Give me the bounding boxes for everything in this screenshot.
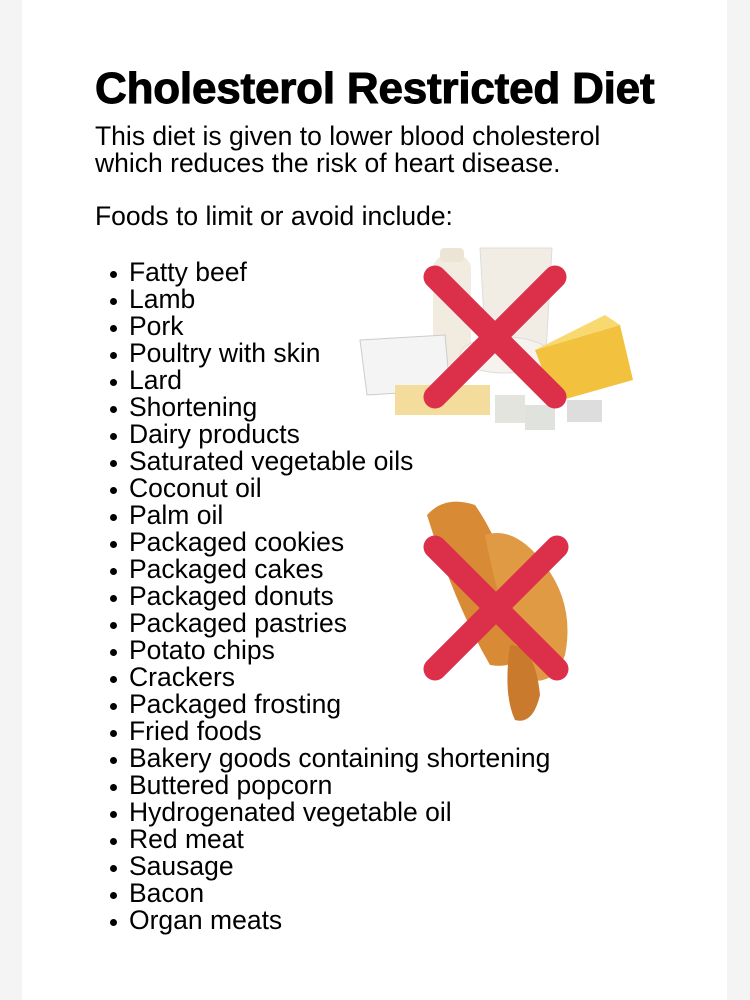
intro text: This diet is given to lower blood cholesterol	[95, 121, 600, 151]
food list: Bakery goods containing shortening	[129, 743, 550, 773]
butter / cheese blocks	[395, 385, 602, 430]
chicken pieces	[427, 502, 568, 721]
food list	[110, 257, 550, 935]
food list: Hydrogenated vegetable oil	[129, 797, 452, 827]
food list: Palm oil	[129, 500, 223, 530]
food list: Packaged cakes	[129, 554, 323, 584]
food list: Packaged frosting	[129, 689, 341, 719]
yogurt tub	[360, 335, 450, 395]
food list: Fatty beef	[129, 257, 247, 287]
food list: Pork	[129, 311, 184, 341]
food list: Potato chips	[129, 635, 275, 665]
food list: Lamb	[129, 284, 195, 314]
intro text: which reduces the risk of heart disease.	[95, 148, 560, 178]
food list: Sausage	[129, 851, 234, 881]
food list: Poultry with skin	[129, 338, 320, 368]
food list: Shortening	[129, 392, 257, 422]
milk bottle	[433, 248, 471, 365]
cheese wedge	[535, 315, 633, 402]
lead text: Foods to limit or avoid include:	[95, 201, 453, 231]
red X	[435, 547, 557, 669]
food list: Red meat	[129, 824, 244, 854]
food list: Crackers	[129, 662, 235, 692]
cottage cheese bowl	[460, 337, 550, 373]
food list: Fried foods	[129, 716, 262, 746]
intro text	[95, 121, 600, 178]
food list: Bacon	[129, 878, 204, 908]
icon: dairy crossed out	[360, 248, 633, 430]
food list: Dairy products	[129, 419, 300, 449]
glass of milk	[480, 248, 552, 370]
icon: fried chicken crossed out	[424, 502, 568, 721]
title: Cholesterol Restricted Diet	[95, 64, 654, 113]
food list: Lard	[129, 365, 182, 395]
food list: Buttered popcorn	[129, 770, 332, 800]
food list: Packaged pastries	[129, 608, 347, 638]
red X	[435, 277, 555, 397]
food list: Organ meats	[129, 905, 282, 935]
food list: Saturated vegetable oils	[129, 446, 413, 476]
food list: Coconut oil	[129, 473, 262, 503]
food list: Packaged donuts	[129, 581, 334, 611]
food list: Packaged cookies	[129, 527, 344, 557]
